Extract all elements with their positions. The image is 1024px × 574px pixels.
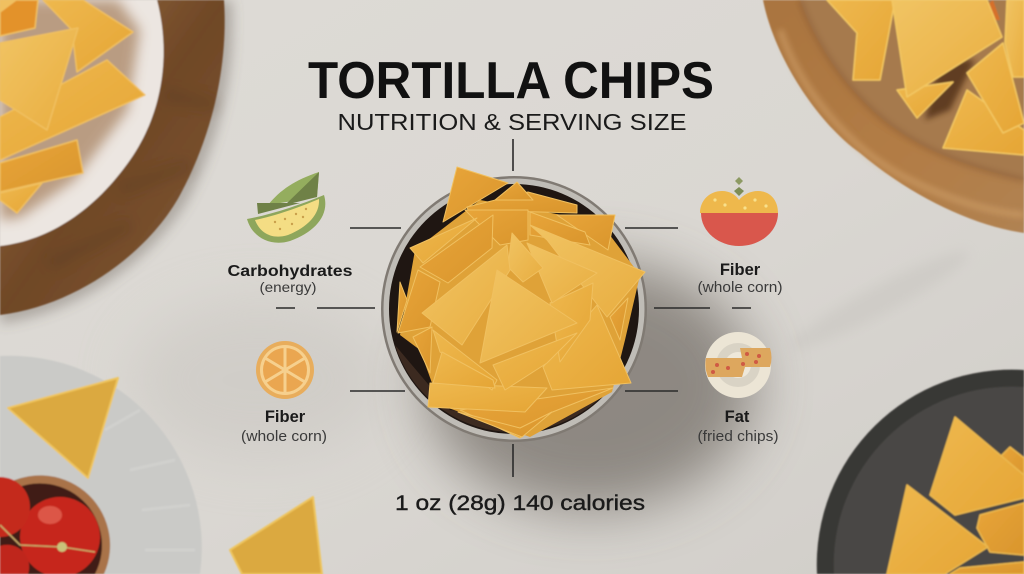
label: whole corn right: (whole corn) bbox=[698, 280, 782, 296]
top-left wooden board with white bowl of chips bbox=[0, 0, 233, 324]
serving size callout: 1 oz (28g) 140 calories bbox=[395, 492, 645, 515]
bottom chip on table bbox=[230, 497, 322, 574]
soft bowl shadow bbox=[425, 260, 755, 510]
icon: fat plate bbox=[705, 332, 772, 398]
icon: carbohydrates melon bbox=[247, 172, 325, 243]
label: fried chips: (fried chips) bbox=[698, 429, 778, 445]
label: fat: Fat bbox=[725, 408, 750, 426]
label: fiber right: Fiber bbox=[720, 261, 761, 279]
bottom-right dark plate with chips bbox=[817, 370, 1024, 574]
title: TORTILLA CHIPS bbox=[308, 52, 714, 110]
label: carbohydrates: Carbohydrates bbox=[228, 263, 352, 280]
label: energy: (energy) bbox=[260, 279, 316, 295]
label: fiber left: Fiber bbox=[265, 408, 306, 426]
label: whole corn left: (whole corn) bbox=[241, 429, 327, 445]
connector lines bbox=[276, 139, 751, 477]
icon: orange slice bbox=[256, 341, 314, 399]
icon: red bowl with corn bbox=[700, 177, 778, 246]
subtitle: NUTRITION & SERVING SIZE bbox=[338, 109, 686, 135]
bottom-left plate with chip and tomatoes bbox=[0, 356, 202, 574]
centre bowl of tortilla chips bbox=[381, 167, 647, 442]
wooden dish with tomatoes bbox=[0, 475, 110, 574]
top-right wooden board with chips bbox=[763, 0, 1024, 233]
chip on plate bbox=[8, 378, 118, 478]
